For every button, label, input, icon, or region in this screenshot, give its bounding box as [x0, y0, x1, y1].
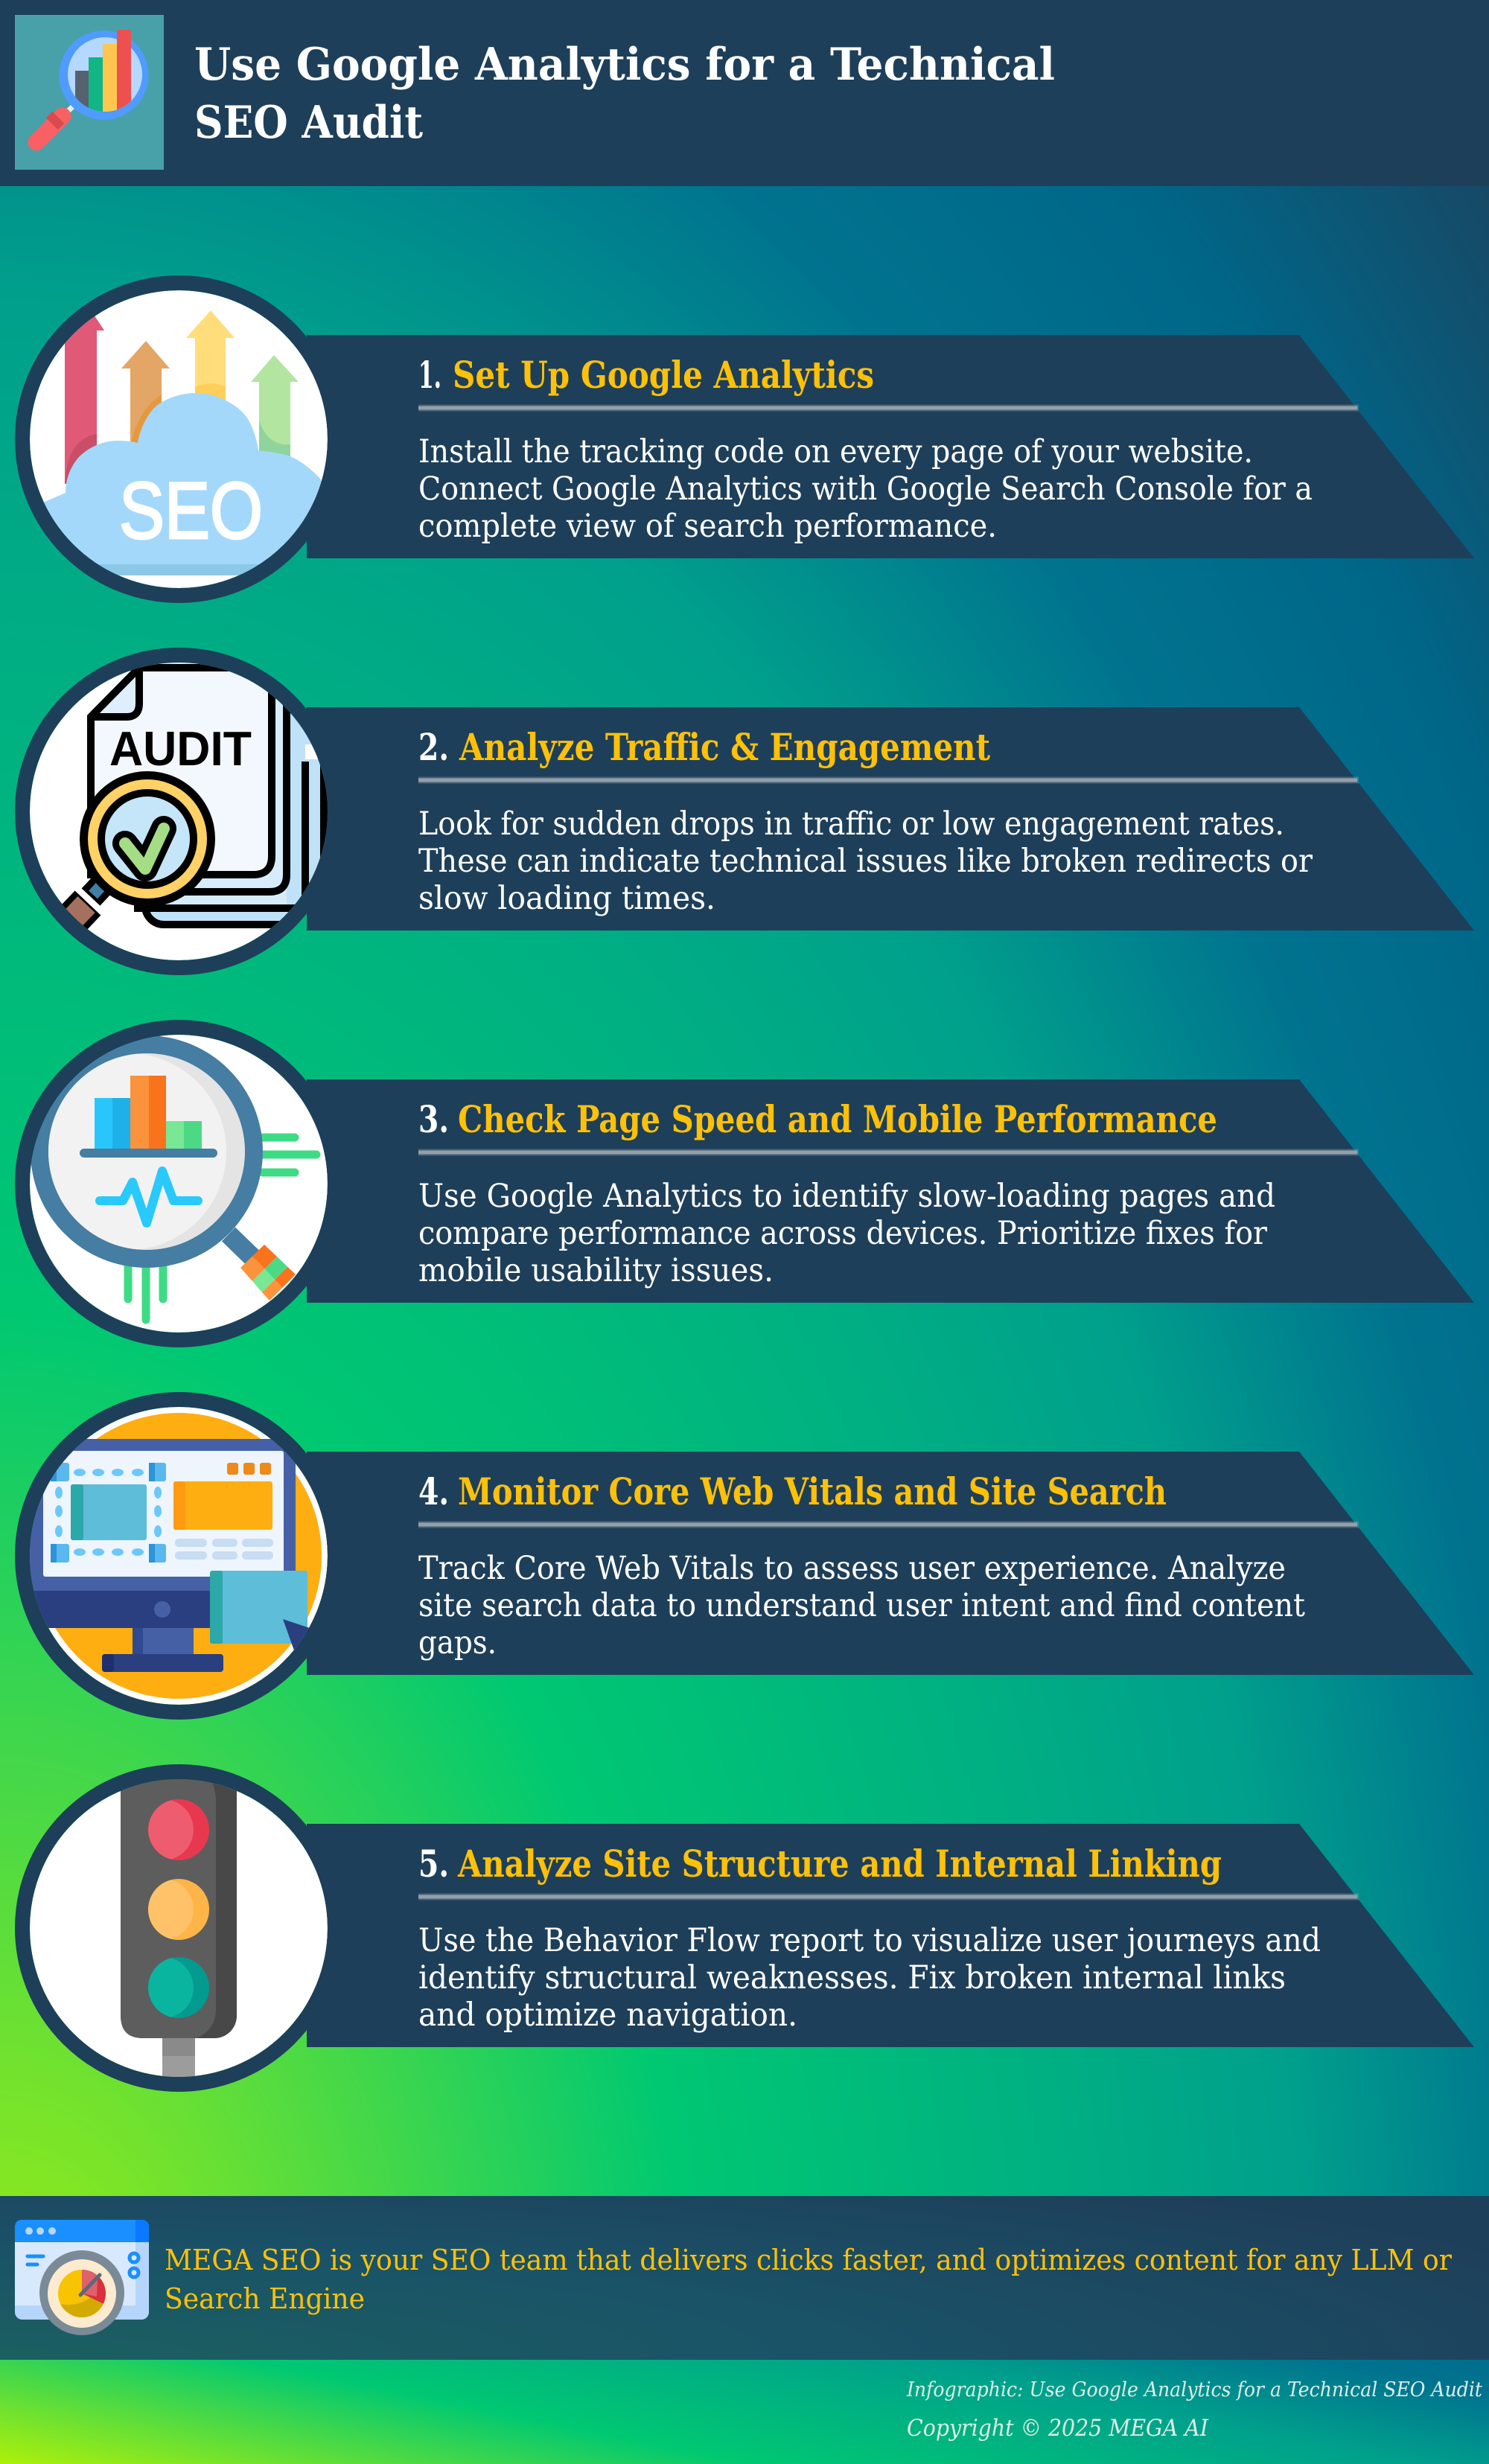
credits section [0, 2360, 1489, 2464]
body text 2 [418, 805, 1313, 917]
title: Use Google Analytics for a Technical [194, 39, 1055, 91]
circle ring 2 [22, 655, 335, 968]
footer promo band [0, 2196, 1489, 2360]
step 1 [15, 283, 1474, 596]
body text 5 [418, 1922, 1321, 2034]
body text 5: and optimize navigation. [418, 1997, 797, 2034]
circle ring 4 [22, 1399, 335, 1712]
circle ring 1 [22, 283, 335, 596]
body text 2: slow loading times. [418, 880, 715, 917]
body text 1: Install the tracking code on every page of your website. [418, 433, 1253, 470]
body text 4: Track Core Web Vitals to assess user experience. Analyze [418, 1550, 1286, 1587]
banner 4 [307, 1452, 1474, 1675]
body text 1: complete view of search performance. [418, 508, 997, 545]
credits text: Copyright © 2025 MEGA AI [907, 2415, 1209, 2442]
step 4 [22, 1399, 1474, 1712]
body text 4: gaps. [418, 1624, 497, 1662]
credits text [906, 2378, 1482, 2442]
body text 5: Use the Behavior Flow report to visualize user journeys and [418, 1922, 1321, 1959]
body text 3 [418, 1178, 1275, 1289]
heading 2: 2. [418, 725, 449, 769]
banner 2 [307, 707, 1474, 931]
body text 5: identify structural weaknesses. Fix broken internal links [418, 1959, 1286, 1997]
heading 3: Check Page Speed and Mobile Performance [458, 1097, 1217, 1141]
promo text [165, 2244, 1453, 2315]
circle ring 5 [22, 1772, 335, 2084]
promo text: MEGA SEO is your SEO team that delivers clicks faster, and optimizes content for any LLM or [165, 2244, 1453, 2276]
step 5 [22, 1764, 1474, 2084]
body text 3: compare performance across devices. Prioritize fixes for [418, 1215, 1267, 1252]
header [0, 0, 1489, 186]
promo text: Search Engine [165, 2282, 365, 2315]
body text 4 [418, 1550, 1305, 1662]
body text 3: Use Google Analytics to identify slow-loading pages and [418, 1178, 1275, 1215]
body text 1 [418, 433, 1313, 545]
heading 1: Set Up Google Analytics [453, 353, 874, 397]
heading 3: 3. [418, 1097, 449, 1141]
title: SEO Audit [194, 97, 423, 149]
heading 5: 5. [418, 1842, 449, 1886]
step 2 [22, 655, 1474, 968]
icon: browser window with gauge [15, 2220, 149, 2335]
icon label: AUDIT: AUDIT [109, 721, 252, 776]
banner 3 [307, 1079, 1474, 1303]
icon: traffic light [30, 1764, 328, 2077]
body text 1: Connect Google Analytics with Google Search Console for a [418, 470, 1313, 508]
title [194, 39, 1055, 149]
heading 4: 4. [418, 1469, 449, 1513]
step 3 [22, 1027, 1474, 1340]
icon: audit document with magnifier [30, 655, 328, 960]
icon: SEO cloud with arrows [15, 290, 342, 588]
icon label: SEO: SEO [119, 465, 263, 555]
body text 3: mobile usability issues. [418, 1252, 774, 1289]
heading 2: Analyze Traffic & Engagement [459, 725, 990, 769]
heading 1: 1. [418, 353, 441, 397]
banner 5 [307, 1824, 1474, 2047]
heading 5: Analyze Site Structure and Internal Linking [457, 1842, 1222, 1886]
icon: magnifier over speed chart [30, 1035, 328, 1332]
icon: desktop monitor layout [22, 1407, 328, 1705]
body text 2: These can indicate technical issues like broken redirects or [418, 843, 1313, 880]
circle ring 3 [22, 1027, 335, 1340]
body text 2: Look for sudden drops in traffic or low engagement rates. [418, 805, 1284, 843]
icon: magnifier with bar chart [15, 15, 164, 170]
body text 4: site search data to understand user intent and find content [418, 1587, 1305, 1624]
banner 1 [307, 335, 1474, 558]
heading 4: Monitor Core Web Vitals and Site Search [458, 1469, 1167, 1513]
